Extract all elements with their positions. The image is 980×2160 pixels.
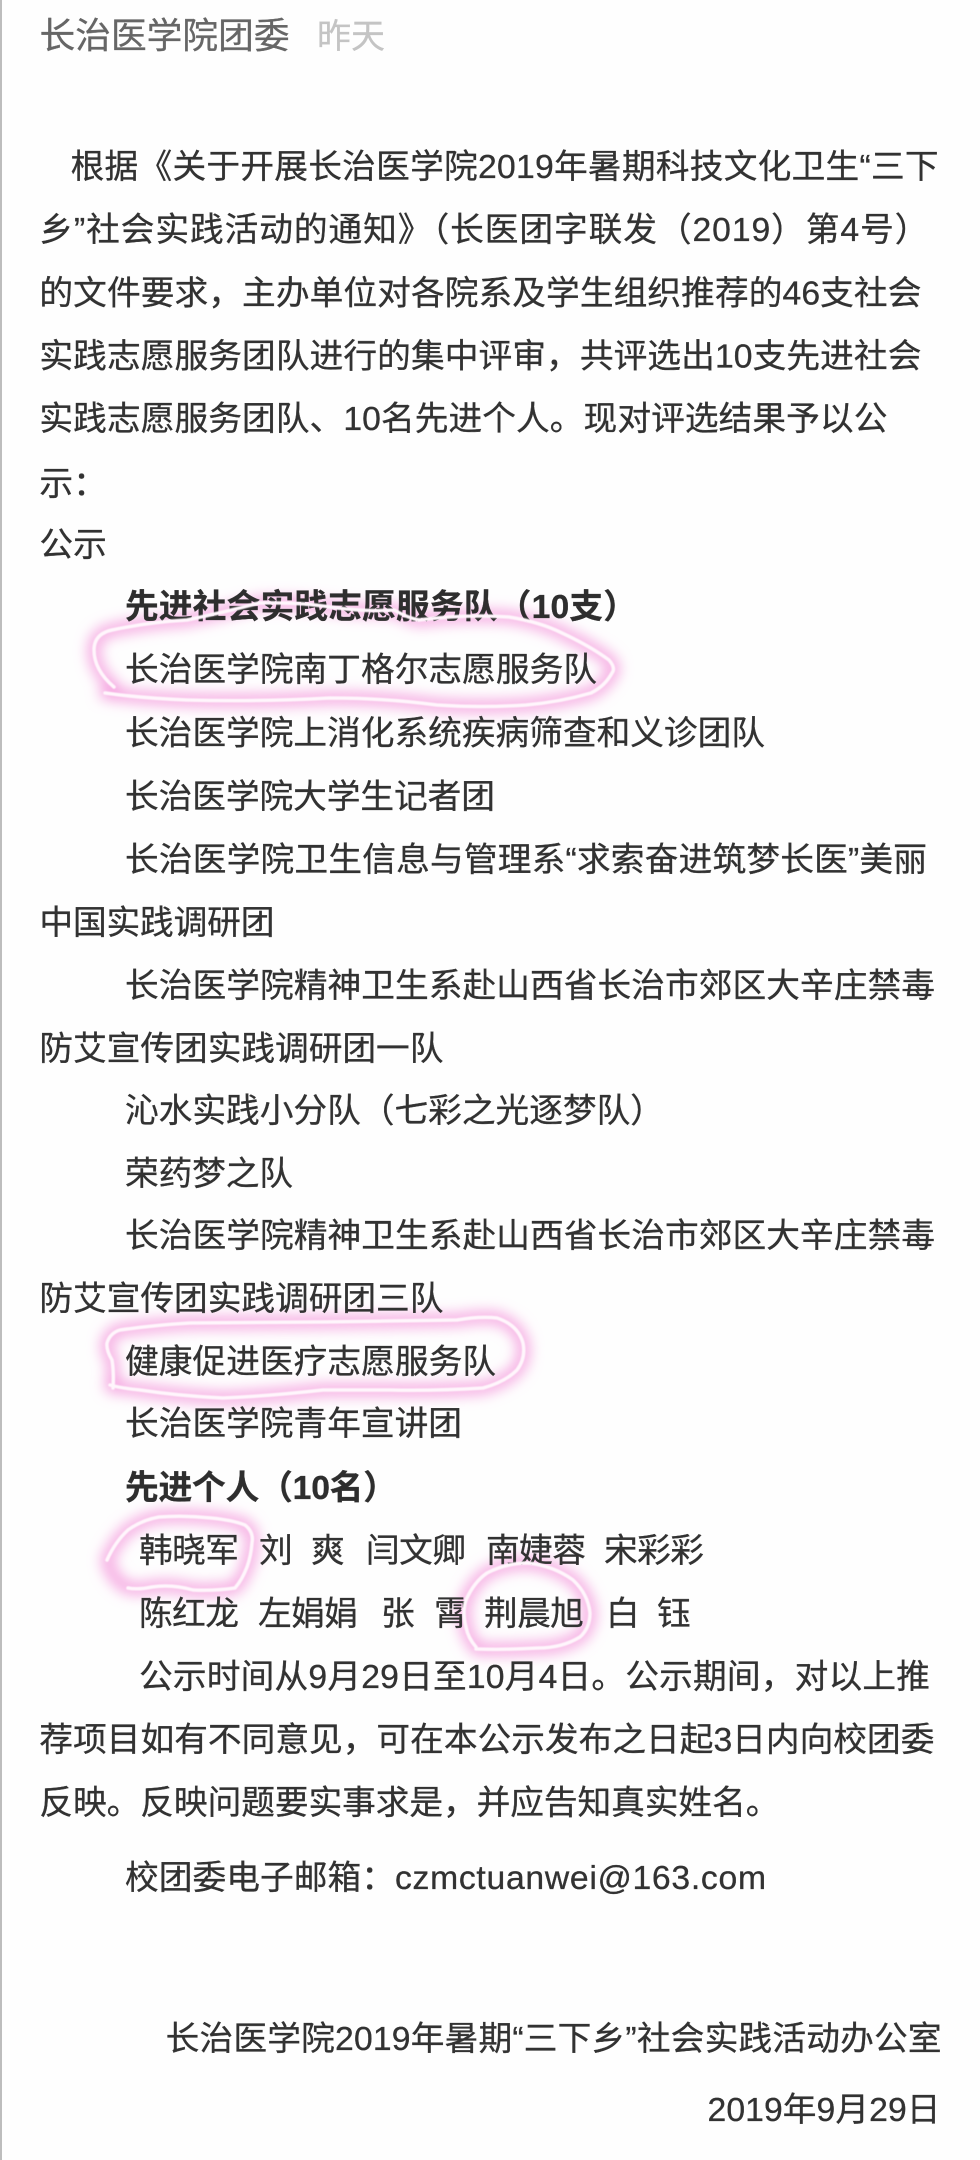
team list: 长治医学院南丁格尔志愿服务队 (125, 651, 597, 689)
names list: 霄 (434, 1595, 468, 1633)
heading: advanced individuals: 先进个人（10名） (125, 1469, 397, 1507)
intro paragraph: 公示 (39, 526, 107, 564)
team list: 防艾宣传团实践调研团一队 (39, 1030, 443, 1068)
names list: 白 (606, 1595, 640, 1633)
team list: 长治医学院大学生记者团 (125, 778, 495, 816)
team list: 沁水实践小分队（七彩之光逐梦队） (125, 1092, 664, 1130)
names list: 张 (381, 1595, 415, 1633)
intro paragraph: 示： (39, 465, 107, 503)
notice period paragraph (39, 1658, 934, 1822)
intro paragraph: 乡”社会实践活动的通知》（长医团字联发（2019）第4号） (39, 211, 928, 249)
highlight strokes: white hand-drawn circles around names (94, 603, 613, 1649)
email line: 校团委电子邮箱： (125, 1859, 395, 1897)
notice period paragraph: 公示时间从9月29日至10月4日。公示期间，对以上推 (139, 1658, 930, 1696)
names list (139, 1532, 704, 1633)
team list: 长治医学院精神卫生系赴山西省长治市郊区大辛庄禁毒 (125, 1217, 935, 1255)
header: account name and time: 长治医学院团委 (40, 16, 290, 56)
names list: 钰 (657, 1595, 691, 1633)
intro paragraph: 实践志愿服务团队、10名先进个人。现对评选结果予以公 (39, 400, 887, 438)
team list: 荣药梦之队 (125, 1155, 293, 1193)
names list: 宋彩彩 (604, 1532, 704, 1570)
intro paragraph: 根据《关于开展长治医学院2019年暑期科技文化卫生“三下 (71, 148, 939, 186)
names list: 左娟娟 (258, 1595, 358, 1633)
heading: advanced volunteer teams: 先进社会实践志愿服务队（10支） (125, 588, 637, 626)
team list: 长治医学院精神卫生系赴山西省长治市郊区大辛庄禁毒 (125, 967, 935, 1005)
email line: czmctuanwei@163.com (395, 1859, 766, 1897)
signature: issuing office: 长治医学院2019年暑期“三下乡”社会实践活动办公室 (166, 2020, 942, 2058)
intro paragraph (39, 148, 939, 564)
intro paragraph: 的文件要求，主办单位对各院系及学生组织推荐的46支社会 (39, 274, 921, 312)
names list: 爽 (311, 1532, 345, 1570)
team list: 长治医学院青年宣讲团 (125, 1405, 462, 1443)
notice period paragraph: 荐项目如有不同意见，可在本公示发布之日起3日内向校团委 (39, 1721, 934, 1759)
names list: 韩晓军 (139, 1532, 239, 1570)
team list: 长治医学院上消化系统疾病筛查和义诊团队 (125, 714, 765, 752)
names list: 荆晨旭 (484, 1595, 584, 1633)
header: account name and time: 昨天 (317, 18, 385, 56)
team list: 防艾宣传团实践调研团三队 (39, 1280, 443, 1318)
team list: 中国实践调研团 (39, 904, 274, 942)
email line (125, 1859, 766, 1897)
names list: 陈红龙 (139, 1595, 239, 1633)
team list (39, 651, 935, 1443)
names list: 刘 (259, 1532, 293, 1570)
team list: 长治医学院卫生信息与管理系“求索奋进筑梦长医”美丽 (125, 841, 927, 879)
team list: 健康促进医疗志愿服务队 (125, 1343, 496, 1381)
notice period paragraph: 反映。反映问题要实事求是，并应告知真实姓名。 (39, 1784, 779, 1822)
names list: 闫文卿 (366, 1532, 466, 1570)
highlight glow: pink halos behind circled names (94, 603, 613, 1649)
names list: 南婕蓉 (486, 1532, 586, 1570)
signature: date: 2019年9月29日 (708, 2091, 940, 2129)
intro paragraph: 实践志愿服务团队进行的集中评审，共评选出10支先进社会 (39, 338, 921, 376)
